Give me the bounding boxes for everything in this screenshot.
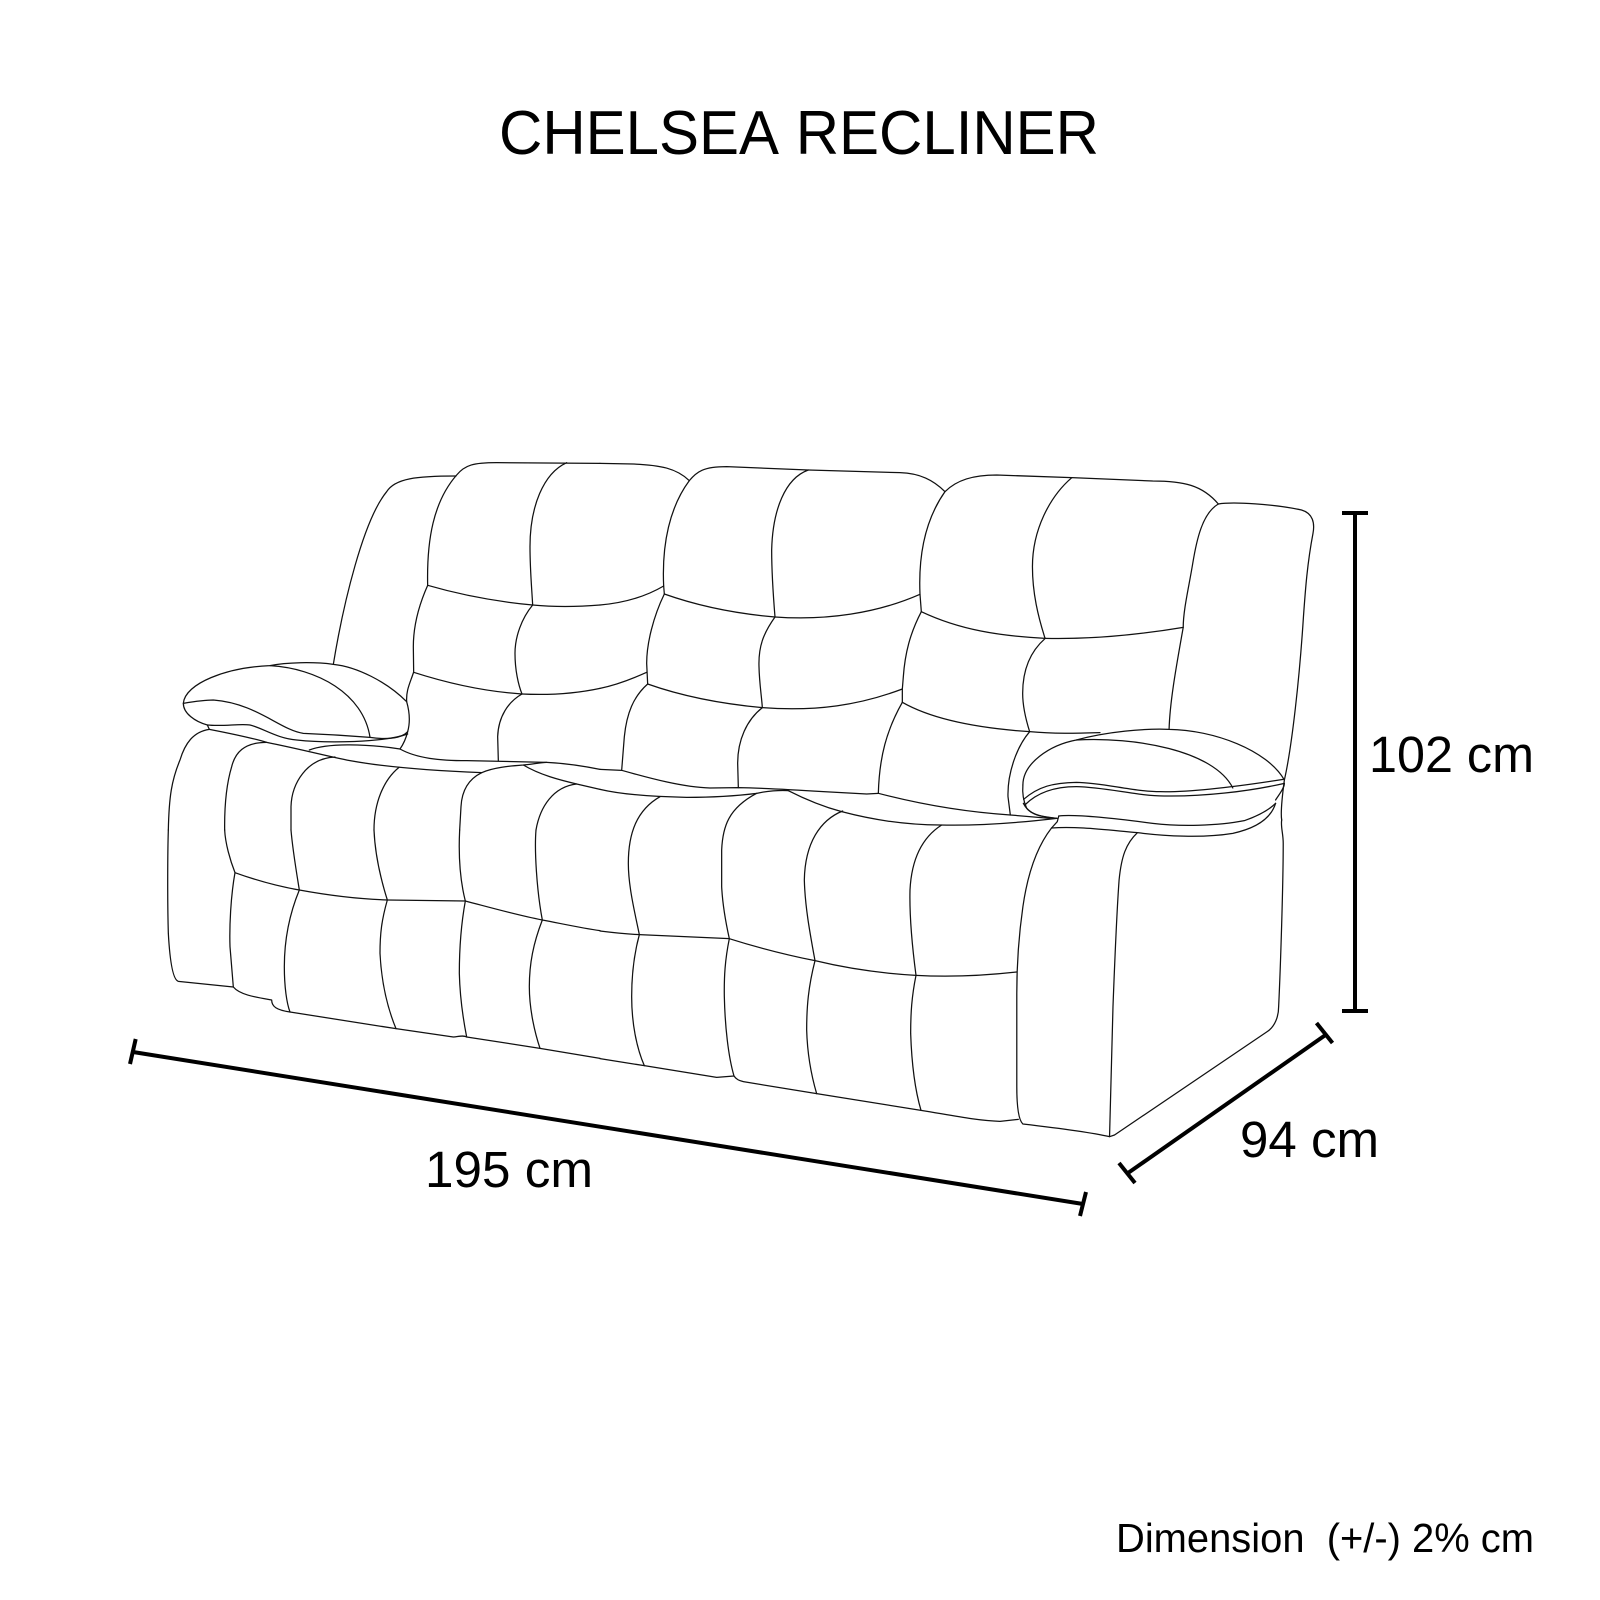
back cushions — [407, 463, 1218, 815]
left armrest — [183, 663, 409, 749]
width dimension line — [130, 1039, 1086, 1216]
right armrest — [1023, 729, 1284, 836]
sofa line drawing — [168, 463, 1314, 1137]
seat cushions and front panel — [168, 729, 1057, 1121]
height label: 102 cm — [1369, 726, 1534, 783]
tolerance note: Dimension (+/-) 2% cm — [1116, 1515, 1534, 1561]
depth label: 94 cm — [1240, 1111, 1379, 1168]
left back wing — [333, 476, 456, 664]
height dimension line — [1342, 513, 1368, 1011]
depth dimension line — [1119, 1023, 1332, 1183]
right side panel — [1017, 820, 1283, 1137]
right back wing — [1169, 503, 1314, 820]
width label: 195 cm — [425, 1141, 593, 1198]
title: CHELSEA RECLINER — [499, 99, 1099, 168]
